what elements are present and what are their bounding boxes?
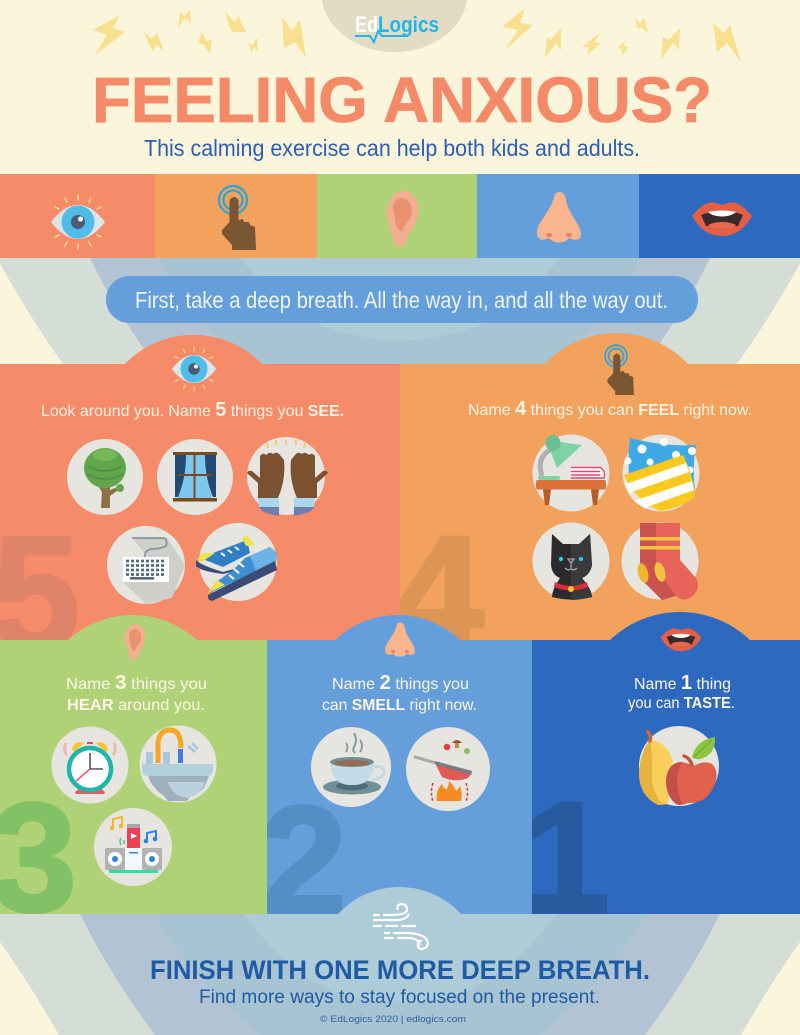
icon: keyboard bbox=[107, 526, 185, 604]
hear text: Name 3 things you bbox=[66, 672, 207, 694]
logo badge bbox=[322, 0, 467, 52]
smell text: Name 2 things you bbox=[332, 672, 469, 694]
icon: wind bbox=[373, 904, 428, 949]
hear text bbox=[66, 672, 207, 714]
five senses strip bbox=[0, 174, 800, 258]
icon: pillows bbox=[622, 434, 700, 512]
big number 1 bbox=[532, 802, 607, 914]
big number 4: 4 bbox=[392, 502, 484, 685]
closing sub-text: Find more ways to stay focused on the present. bbox=[199, 987, 600, 1008]
icon: sock bbox=[622, 522, 698, 600]
icon: alarm clock bbox=[52, 726, 128, 804]
icon: tree bbox=[67, 439, 143, 515]
logo badge: Logics bbox=[378, 12, 439, 37]
title: FEELING ANXIOUS? bbox=[92, 64, 712, 136]
icon: sneakers bbox=[196, 523, 277, 601]
logo badge: Ed bbox=[355, 12, 378, 37]
breath hump bbox=[338, 887, 461, 914]
see text: Look around you. Name 5 things you SEE. bbox=[41, 399, 344, 421]
taste text bbox=[628, 672, 735, 712]
icon: tea cup bbox=[311, 727, 391, 807]
closing heading: FINISH WITH ONE MORE DEEP BREATH. bbox=[150, 955, 650, 985]
panel: smell bbox=[267, 615, 532, 914]
taste text: you can TASTE. bbox=[628, 695, 735, 712]
icon: pear and apple bbox=[639, 726, 719, 806]
smell text bbox=[322, 672, 477, 714]
icon: hands bbox=[247, 437, 328, 516]
icon: eye bbox=[172, 347, 216, 391]
big number 2: 2 bbox=[260, 774, 347, 947]
panel: see bbox=[0, 334, 400, 640]
icon: stereo bbox=[94, 808, 172, 886]
panel: feel bbox=[400, 333, 800, 640]
icon: ear bbox=[124, 624, 145, 661]
lightning bolts bbox=[93, 8, 741, 62]
instruction pill bbox=[106, 276, 698, 323]
icon: window bbox=[157, 439, 233, 515]
feel text: Name 4 things you can FEEL right now. bbox=[468, 398, 752, 420]
panel: hear bbox=[0, 615, 267, 944]
icon: mouth bbox=[661, 628, 701, 651]
icon: nose bbox=[385, 622, 415, 657]
top breathing rings bbox=[0, 258, 800, 372]
icon: black cat bbox=[532, 522, 610, 600]
panel: taste bbox=[532, 612, 800, 914]
instruction pill: First, take a deep breath. All the way in, and all the way out. bbox=[135, 287, 668, 313]
smell text: can SMELL right now. bbox=[322, 697, 477, 714]
bottom breathing rings bbox=[0, 914, 800, 1035]
icon: frying pan bbox=[406, 727, 490, 811]
big number 1: 1 bbox=[522, 770, 610, 946]
hear text: HEAR around you. bbox=[67, 697, 205, 714]
icon: lamp and books bbox=[532, 434, 610, 512]
icon: touch hand bbox=[605, 345, 634, 395]
subtitle: This calming exercise can help both kids and adults. bbox=[144, 135, 640, 161]
credits: © EdLogics 2020 | edlogics.com bbox=[320, 1014, 466, 1025]
icon: sink bbox=[140, 726, 216, 802]
taste text: Name 1 thing bbox=[634, 672, 731, 694]
